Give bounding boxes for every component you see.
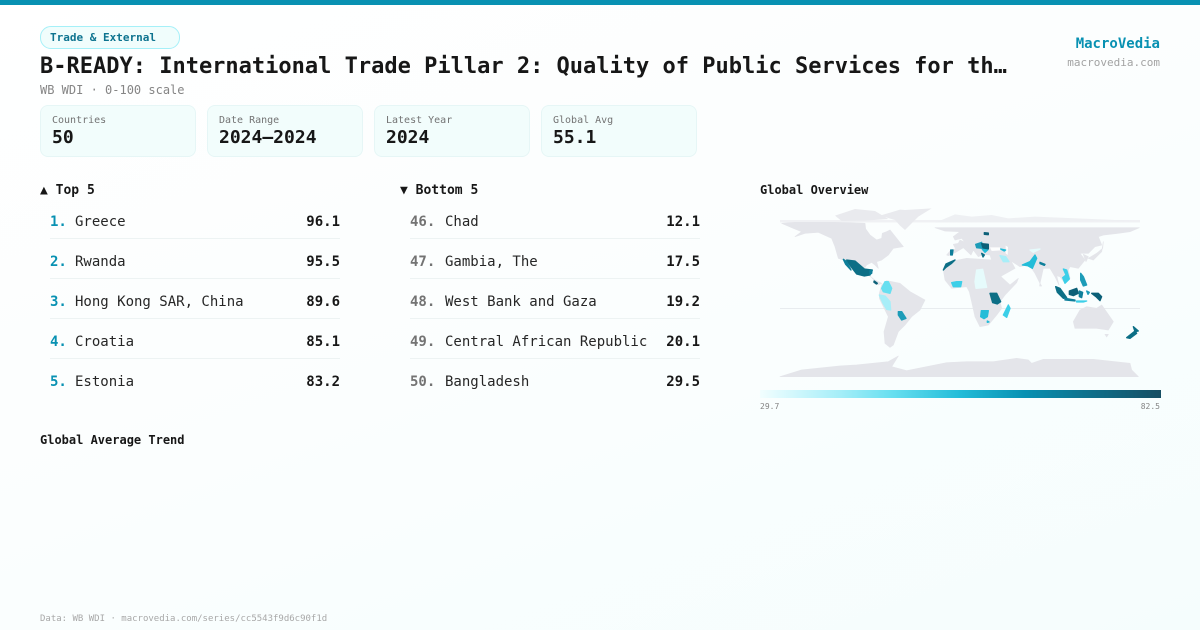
list: top 5: Greece <box>75 214 126 230</box>
list: bottom 5: 47. <box>410 254 435 270</box>
list: top 5: 4. <box>50 334 67 350</box>
list: top 5: 96.1 <box>306 214 340 230</box>
brand url: macrovedia.com <box>1067 56 1160 69</box>
stat card: global average: Global Avg <box>553 115 613 126</box>
list: bottom 5: 19.2 <box>666 294 700 310</box>
list: top 5: 95.5 <box>306 254 340 270</box>
subtitle: WB WDI · 0-100 scale <box>40 83 184 97</box>
list: bottom 5: 49. <box>410 334 435 350</box>
stat card: date range <box>207 105 363 157</box>
land: Antarctica <box>780 356 1138 377</box>
list: top 5: Croatia <box>75 334 134 350</box>
colour scale legend <box>760 390 1161 398</box>
land: Africa and Arabia <box>943 258 1018 327</box>
list: top 5 <box>50 214 340 390</box>
highlighted countries: Southeast Asia and Oceania <box>1056 269 1138 338</box>
list: bottom 5: 20.1 <box>666 334 700 350</box>
category tag: Trade & External <box>50 31 156 44</box>
list: top 5: 83.2 <box>306 374 340 390</box>
list: top 5: Estonia <box>75 374 134 390</box>
brand name: MacroVedia <box>1076 36 1160 52</box>
stat card: global average: 55.1 <box>553 127 596 148</box>
equator line <box>780 308 1140 310</box>
list: bottom 5: 50. <box>410 374 435 390</box>
list: bottom 5: West Bank and Gaza <box>445 294 597 310</box>
list: top 5: 1. <box>50 214 67 230</box>
list: top 5: Rwanda <box>75 254 126 270</box>
list: bottom 5: 46. <box>410 214 435 230</box>
stat card: latest year: 2024 <box>386 127 429 148</box>
highlighted countries: Europe and West Asia <box>951 233 1045 268</box>
stat card: date range: Date Range <box>219 115 279 126</box>
highlighted countries: South America and Africa <box>870 260 1010 322</box>
world map <box>780 208 1140 377</box>
list: bottom 5: Chad <box>445 214 479 230</box>
heading: top 5: ▲ Top 5 <box>40 183 95 198</box>
list: bottom 5: Bangladesh <box>445 374 529 390</box>
list: top 5: 5. <box>50 374 67 390</box>
arctic band <box>780 220 1140 222</box>
list: bottom 5: Gambia, The <box>445 254 538 270</box>
list: bottom 5: 29.5 <box>666 374 700 390</box>
stat card: latest year: Latest Year <box>386 115 452 126</box>
list: bottom 5: 17.5 <box>666 254 700 270</box>
top accent bar <box>0 0 1200 5</box>
heading: bottom 5: ▼ Bottom 5 <box>400 183 478 198</box>
title: B-READY: International Trade Pillar 2: Quality of Public Services for th… <box>40 54 1007 79</box>
stat card: date range: 2024–2024 <box>219 127 317 148</box>
land: Americas <box>782 208 932 285</box>
list: bottom 5: 12.1 <box>666 214 700 230</box>
legend maximum: 82.5 <box>1141 402 1160 411</box>
category tag <box>40 26 180 49</box>
list: top 5: 3. <box>50 294 67 310</box>
heading: global average trend: Global Average Trend <box>40 433 184 447</box>
list: bottom 5 <box>410 214 700 390</box>
list: top 5: 89.6 <box>306 294 340 310</box>
legend minimum: 29.7 <box>760 402 779 411</box>
list: top 5: Hong Kong SAR, China <box>75 294 244 310</box>
land: Eurasia and Australia <box>935 214 1139 337</box>
stat card: latest year <box>374 105 530 157</box>
highlighted countries: Americas <box>843 259 877 284</box>
stat card: countries: 50 <box>52 127 74 148</box>
list: bottom 5: 48. <box>410 294 435 310</box>
list: top 5: 85.1 <box>306 334 340 350</box>
heading: global overview: Global Overview <box>760 183 868 197</box>
stat card: countries <box>40 105 196 157</box>
list: top 5: 2. <box>50 254 67 270</box>
stat card: global average <box>541 105 697 157</box>
stat card: countries: Countries <box>52 115 106 126</box>
footer source: Data: WB WDI · macrovedia.com/series/cc5543f9d6c90f1d <box>40 614 327 624</box>
list: bottom 5: Central African Republic <box>445 334 647 350</box>
